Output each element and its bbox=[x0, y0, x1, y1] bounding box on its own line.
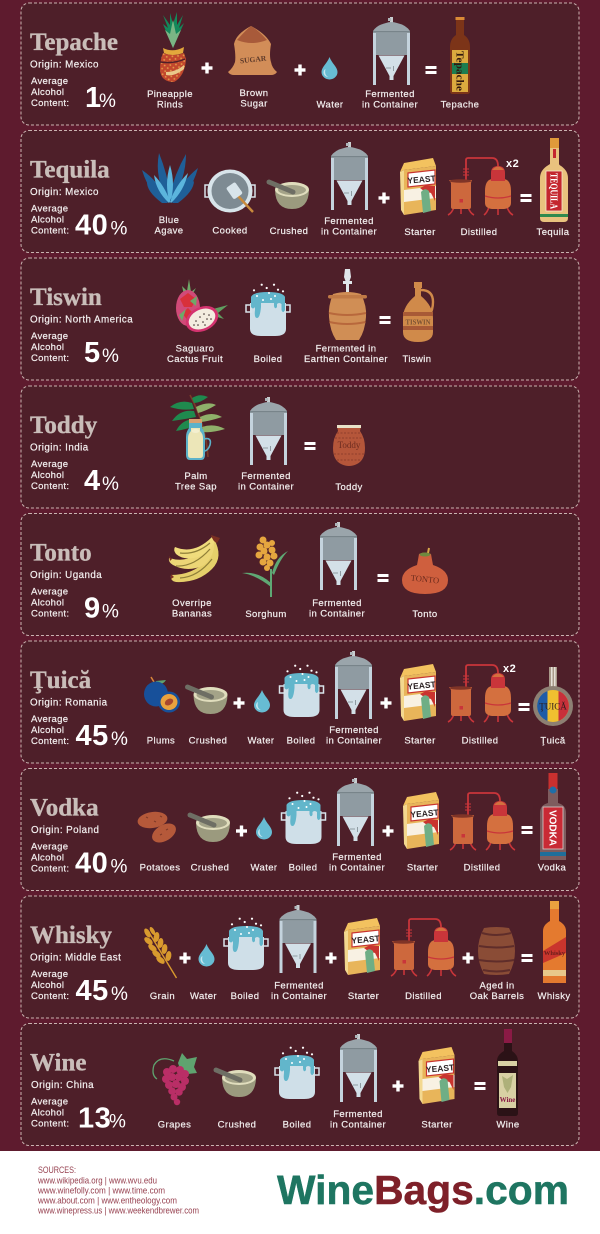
heading: Vodka bbox=[30, 794, 99, 822]
label: Sugar bbox=[240, 98, 268, 110]
icon: tequila bottle bbox=[540, 138, 568, 222]
alcohol caption: Average bbox=[31, 331, 68, 342]
stats: Tequila bbox=[30, 156, 128, 242]
label: in Container bbox=[326, 736, 382, 746]
panel card bbox=[21, 641, 579, 763]
stats: Vodka bbox=[30, 794, 128, 880]
alcohol value: % bbox=[102, 346, 119, 367]
label: Earthen Container bbox=[304, 354, 388, 365]
equals bbox=[426, 66, 436, 74]
alcohol value: % bbox=[111, 729, 128, 750]
heading: Tequila bbox=[30, 156, 110, 184]
alcohol caption: Content: bbox=[31, 608, 69, 620]
label: Rinds bbox=[157, 100, 183, 110]
equals bbox=[522, 826, 532, 834]
plus bbox=[236, 826, 247, 836]
stats: Tonto bbox=[30, 540, 119, 624]
alcohol value: % bbox=[99, 91, 116, 112]
label: Starter bbox=[404, 736, 436, 746]
alcohol value: % bbox=[109, 1112, 126, 1132]
icon: boiling pot bbox=[224, 918, 268, 970]
alcohol value: 1 bbox=[85, 82, 102, 114]
panel: Tiswin bbox=[21, 258, 579, 380]
icon: tank bbox=[280, 905, 316, 973]
label: Tonto bbox=[412, 609, 438, 620]
icon: wine bottle bbox=[497, 1029, 518, 1116]
plus bbox=[380, 698, 392, 708]
equals bbox=[518, 703, 530, 711]
equals bbox=[378, 574, 388, 582]
icon: mortar and pestle bbox=[188, 687, 228, 714]
label: in Container bbox=[271, 991, 327, 1002]
icon: still bbox=[448, 158, 513, 215]
icon: overripe bananas bbox=[169, 535, 220, 582]
label: Starter bbox=[348, 991, 379, 1002]
alcohol caption: Alcohol bbox=[31, 342, 64, 353]
plus bbox=[392, 1080, 404, 1092]
icon: mortar and pestle bbox=[216, 1070, 256, 1097]
alcohol caption: Content: bbox=[31, 226, 69, 236]
panel card bbox=[21, 896, 579, 1018]
alcohol caption: Average bbox=[31, 204, 68, 214]
icon: boiling pot bbox=[282, 792, 326, 844]
alcohol caption: Average bbox=[31, 714, 68, 725]
icon: cooked pot bbox=[205, 170, 255, 212]
label: Fermented bbox=[365, 89, 415, 100]
panel: Vodka bbox=[21, 768, 579, 890]
panel card bbox=[21, 258, 579, 380]
label: Fermented bbox=[329, 725, 379, 736]
icon: pineapple rinds bbox=[160, 12, 186, 82]
label: Starter bbox=[421, 1120, 453, 1130]
stats: Tiswin bbox=[30, 284, 133, 369]
panel: Tuica bbox=[21, 641, 579, 763]
label: Tiswin bbox=[403, 354, 431, 365]
label: Water bbox=[248, 736, 274, 746]
label: Fermented bbox=[332, 852, 382, 863]
label: Grain bbox=[150, 991, 175, 1002]
alcohol value: 40 bbox=[75, 210, 108, 242]
equals bbox=[520, 194, 532, 202]
label: Fermented bbox=[274, 980, 324, 992]
heading: Toddy bbox=[30, 412, 98, 439]
alcohol value: 4 bbox=[84, 465, 101, 497]
alcohol caption: Alcohol bbox=[31, 214, 64, 226]
label: in Container bbox=[362, 100, 418, 110]
label: Crushed bbox=[218, 1120, 256, 1130]
alcohol value: 45 bbox=[76, 720, 109, 752]
label: Fermented bbox=[333, 1109, 383, 1120]
label: Cooked bbox=[212, 226, 248, 236]
icon: tank bbox=[320, 522, 357, 590]
icon: boiling pot bbox=[280, 665, 324, 717]
icon: earthen container bbox=[328, 269, 367, 340]
icon: palm tree sap bbox=[170, 395, 225, 460]
alcohol value: % bbox=[102, 602, 119, 622]
icon: water bbox=[198, 944, 214, 966]
icon: tepache bottle: Tepache bbox=[454, 51, 464, 91]
icon: tiswin jug: TISWIN bbox=[406, 318, 431, 326]
label: Cactus Fruit bbox=[167, 354, 223, 365]
icon: tuica flask: ŢUICĂ bbox=[539, 702, 567, 712]
alcohol caption: Average bbox=[31, 969, 68, 980]
alcohol caption: Average bbox=[31, 76, 68, 87]
panel card bbox=[21, 386, 579, 508]
plus bbox=[234, 698, 244, 708]
icon: vodka bottle bbox=[540, 773, 566, 860]
icon: sorghum bbox=[242, 536, 288, 597]
icon: oak barrel bbox=[478, 927, 515, 975]
icon: tiswin jug bbox=[403, 282, 433, 342]
alcohol value: % bbox=[102, 474, 119, 495]
label: Crushed bbox=[189, 736, 227, 746]
label: Aged in bbox=[479, 980, 515, 992]
alcohol value: 13 bbox=[78, 1102, 111, 1134]
multiplier bbox=[506, 158, 519, 170]
icon: plums bbox=[144, 677, 180, 712]
label: in Container bbox=[238, 482, 294, 492]
icon: tonto gourd: TONTO bbox=[410, 573, 440, 585]
icon: toddy pot: Toddy bbox=[338, 440, 361, 450]
label: Boiled bbox=[283, 1120, 311, 1130]
icon: mortar and pestle bbox=[190, 815, 230, 842]
stats: Whisky bbox=[30, 922, 128, 1007]
plus bbox=[326, 952, 336, 964]
icon: yeast bbox=[403, 792, 440, 849]
label: Tequila bbox=[537, 227, 570, 238]
icon: whisky bottle: Whisky bbox=[544, 950, 566, 957]
source line 3: www.about.com | www.entheology.com bbox=[37, 1196, 177, 1206]
icon: tank bbox=[373, 17, 410, 85]
label: Pineapple bbox=[147, 89, 193, 100]
icon: still bbox=[450, 793, 515, 850]
source line 2: www.winefolly.com | www.time.com bbox=[37, 1186, 165, 1196]
stats: Toddy bbox=[30, 412, 119, 497]
label: in Container bbox=[309, 608, 365, 620]
origin: Origin: North America bbox=[30, 314, 133, 326]
label: Overripe bbox=[172, 598, 212, 609]
label: Tepache bbox=[441, 100, 479, 110]
label: Fermented bbox=[241, 471, 291, 482]
origin: Origin: Poland bbox=[31, 825, 99, 836]
origin: Origin: Uganda bbox=[30, 570, 102, 581]
origin: Origin: India bbox=[30, 442, 89, 454]
label: Grapes bbox=[158, 1120, 191, 1130]
label: Crushed bbox=[270, 226, 308, 237]
alcohol caption: Content: bbox=[31, 736, 69, 747]
origin: Origin: Mexico bbox=[30, 187, 99, 198]
label: Starter bbox=[404, 227, 436, 238]
icon: water bbox=[256, 817, 272, 840]
label: Boiled bbox=[254, 354, 282, 365]
alcohol value: 5 bbox=[84, 337, 101, 369]
panel card bbox=[21, 1024, 579, 1146]
equals bbox=[304, 442, 316, 450]
label: Whisky bbox=[537, 991, 571, 1002]
icon: toddy pot bbox=[333, 425, 365, 466]
alcohol caption: Content: bbox=[31, 353, 69, 364]
footer background bbox=[0, 1151, 600, 1234]
origin: Origin: Mexico bbox=[30, 60, 99, 70]
icon: tank bbox=[250, 397, 287, 465]
icon: still bbox=[391, 919, 456, 976]
label: Wine bbox=[496, 1120, 520, 1130]
icon: potatoes bbox=[137, 810, 179, 846]
icon: mortar and pestle bbox=[269, 182, 309, 209]
alcohol value: 40 bbox=[75, 848, 108, 880]
alcohol caption: Alcohol bbox=[31, 725, 64, 736]
icon: water bbox=[254, 690, 270, 712]
label: Distilled bbox=[461, 227, 497, 238]
icon: sugar sack bbox=[228, 26, 277, 75]
alcohol caption: Content: bbox=[31, 481, 69, 492]
origin: Origin: Romania bbox=[30, 698, 108, 708]
alcohol caption: Alcohol bbox=[31, 1108, 64, 1118]
icon: tank bbox=[331, 142, 368, 210]
logo: WineBags.com bbox=[277, 1167, 569, 1213]
stats: Tepache bbox=[30, 29, 118, 114]
panel: Wine bbox=[21, 1024, 579, 1146]
panel card bbox=[21, 514, 579, 636]
sources bbox=[37, 1165, 199, 1216]
alcohol caption: Alcohol bbox=[31, 980, 64, 991]
icon: yeast bbox=[418, 1047, 455, 1104]
icon: yeast bbox=[344, 918, 381, 975]
heading: Tonto bbox=[30, 540, 92, 566]
label: Sorghum bbox=[245, 609, 287, 620]
alcohol caption: Alcohol bbox=[31, 470, 64, 481]
panel card bbox=[21, 130, 579, 252]
equals bbox=[474, 1082, 486, 1090]
label: Blue bbox=[159, 215, 179, 226]
heading: Ţuică bbox=[30, 667, 92, 694]
panel: Toddy bbox=[21, 386, 579, 508]
origin: Origin: China bbox=[31, 1080, 94, 1091]
origin: Origin: Middle East bbox=[30, 952, 121, 964]
heading: Wine bbox=[30, 1050, 86, 1076]
label: Fermented bbox=[324, 216, 374, 227]
icon: saguaro cactus fruit bbox=[176, 279, 228, 337]
equals bbox=[380, 316, 390, 324]
plus bbox=[294, 64, 306, 76]
alcohol value: % bbox=[111, 984, 128, 1005]
label: Starter bbox=[407, 862, 438, 874]
label: Crushed bbox=[191, 862, 229, 874]
stats: Wine bbox=[30, 1050, 126, 1134]
heading: Tiswin bbox=[30, 284, 102, 311]
icon: tonto gourd bbox=[402, 548, 448, 594]
icon: boiling pot bbox=[275, 1047, 319, 1099]
icon: tank bbox=[335, 651, 372, 719]
plus bbox=[378, 192, 390, 204]
icon: blue agave bbox=[142, 153, 198, 203]
label: Distilled bbox=[462, 736, 498, 746]
icon: grain bbox=[143, 926, 176, 978]
icon: still bbox=[448, 665, 513, 722]
panel card bbox=[21, 3, 579, 125]
plus bbox=[462, 952, 474, 964]
equals bbox=[522, 954, 532, 962]
label: Water bbox=[317, 100, 343, 110]
label: Potatoes bbox=[140, 862, 180, 874]
alcohol caption: Content: bbox=[31, 864, 69, 874]
label: in Container bbox=[329, 862, 385, 874]
plus bbox=[202, 62, 212, 74]
heading: Whisky bbox=[30, 922, 112, 949]
panel card bbox=[21, 768, 579, 890]
label: Distilled bbox=[405, 991, 442, 1002]
label: Tree Sap bbox=[175, 482, 217, 492]
alcohol caption: Alcohol bbox=[31, 87, 64, 98]
alcohol value: 45 bbox=[76, 975, 109, 1007]
label: Agave bbox=[155, 226, 183, 236]
label: Vodka bbox=[538, 862, 567, 874]
label: Bananas bbox=[172, 608, 212, 620]
label: Plums bbox=[147, 736, 175, 746]
label: Ţuică bbox=[540, 736, 566, 746]
alcohol caption: Alcohol bbox=[31, 598, 64, 608]
source line 1: www.wikipedia.org | www.wvu.edu bbox=[37, 1176, 157, 1186]
icon: tequila bottle: TEQUILA bbox=[548, 173, 558, 210]
alcohol caption: Average bbox=[31, 1096, 68, 1108]
label: in Container bbox=[330, 1120, 386, 1130]
panel: Tequila bbox=[21, 130, 579, 252]
icon: tepache bottle bbox=[450, 17, 470, 94]
label: Saguaro bbox=[176, 344, 214, 354]
alcohol caption: Content: bbox=[31, 98, 69, 109]
heading: Tepache bbox=[30, 29, 118, 56]
label: Distilled bbox=[464, 862, 500, 874]
label: Water bbox=[190, 991, 217, 1002]
plus bbox=[180, 952, 190, 964]
source line 4: www.winepress.us | www.weekendbrewer.com bbox=[37, 1206, 199, 1216]
alcohol value: % bbox=[110, 856, 128, 878]
icon: yeast bbox=[400, 664, 437, 721]
label: Toddy bbox=[335, 482, 363, 493]
icon: water bbox=[322, 57, 338, 80]
icon: grapes bbox=[153, 1053, 197, 1105]
label: Oak Barrels bbox=[470, 991, 524, 1002]
alcohol value: % bbox=[110, 218, 128, 240]
alcohol caption: Content: bbox=[31, 1118, 69, 1130]
label: Water bbox=[251, 862, 277, 874]
label: Boiled bbox=[231, 991, 259, 1002]
label: Brown bbox=[240, 88, 268, 99]
panel: Tepache bbox=[21, 3, 579, 125]
icon: tank bbox=[337, 778, 374, 846]
alcohol caption: Average bbox=[31, 459, 68, 470]
icon: wine bottle: Wine bbox=[500, 1096, 515, 1104]
panel: Tonto bbox=[21, 514, 579, 636]
icon: sugar sack: SUGAR bbox=[240, 54, 267, 65]
plus bbox=[382, 826, 394, 836]
label: in Container bbox=[321, 226, 377, 238]
alcohol caption: Content: bbox=[31, 991, 69, 1002]
alcohol value: 9 bbox=[84, 592, 101, 624]
label: Fermented in bbox=[316, 344, 376, 354]
panel: Whisky bbox=[21, 896, 579, 1018]
label: Fermented bbox=[312, 598, 362, 609]
icon: yeast bbox=[400, 158, 437, 215]
sources heading: SOURCES: bbox=[38, 1165, 76, 1175]
alcohol caption: Average bbox=[31, 586, 68, 598]
icon: whisky bottle bbox=[543, 901, 566, 983]
alcohol caption: Average bbox=[31, 842, 68, 852]
label: Boiled bbox=[289, 862, 317, 874]
label: Boiled bbox=[287, 736, 315, 746]
alcohol caption: Alcohol bbox=[31, 852, 64, 864]
icon: boiling pot bbox=[246, 284, 290, 336]
stats: Tuica bbox=[30, 667, 128, 752]
multiplier bbox=[503, 663, 516, 675]
label: Palm bbox=[184, 471, 208, 482]
icon: vodka bottle: VODKA bbox=[546, 810, 558, 846]
icon: tank bbox=[340, 1034, 377, 1102]
icon: tuica flask bbox=[533, 667, 573, 726]
